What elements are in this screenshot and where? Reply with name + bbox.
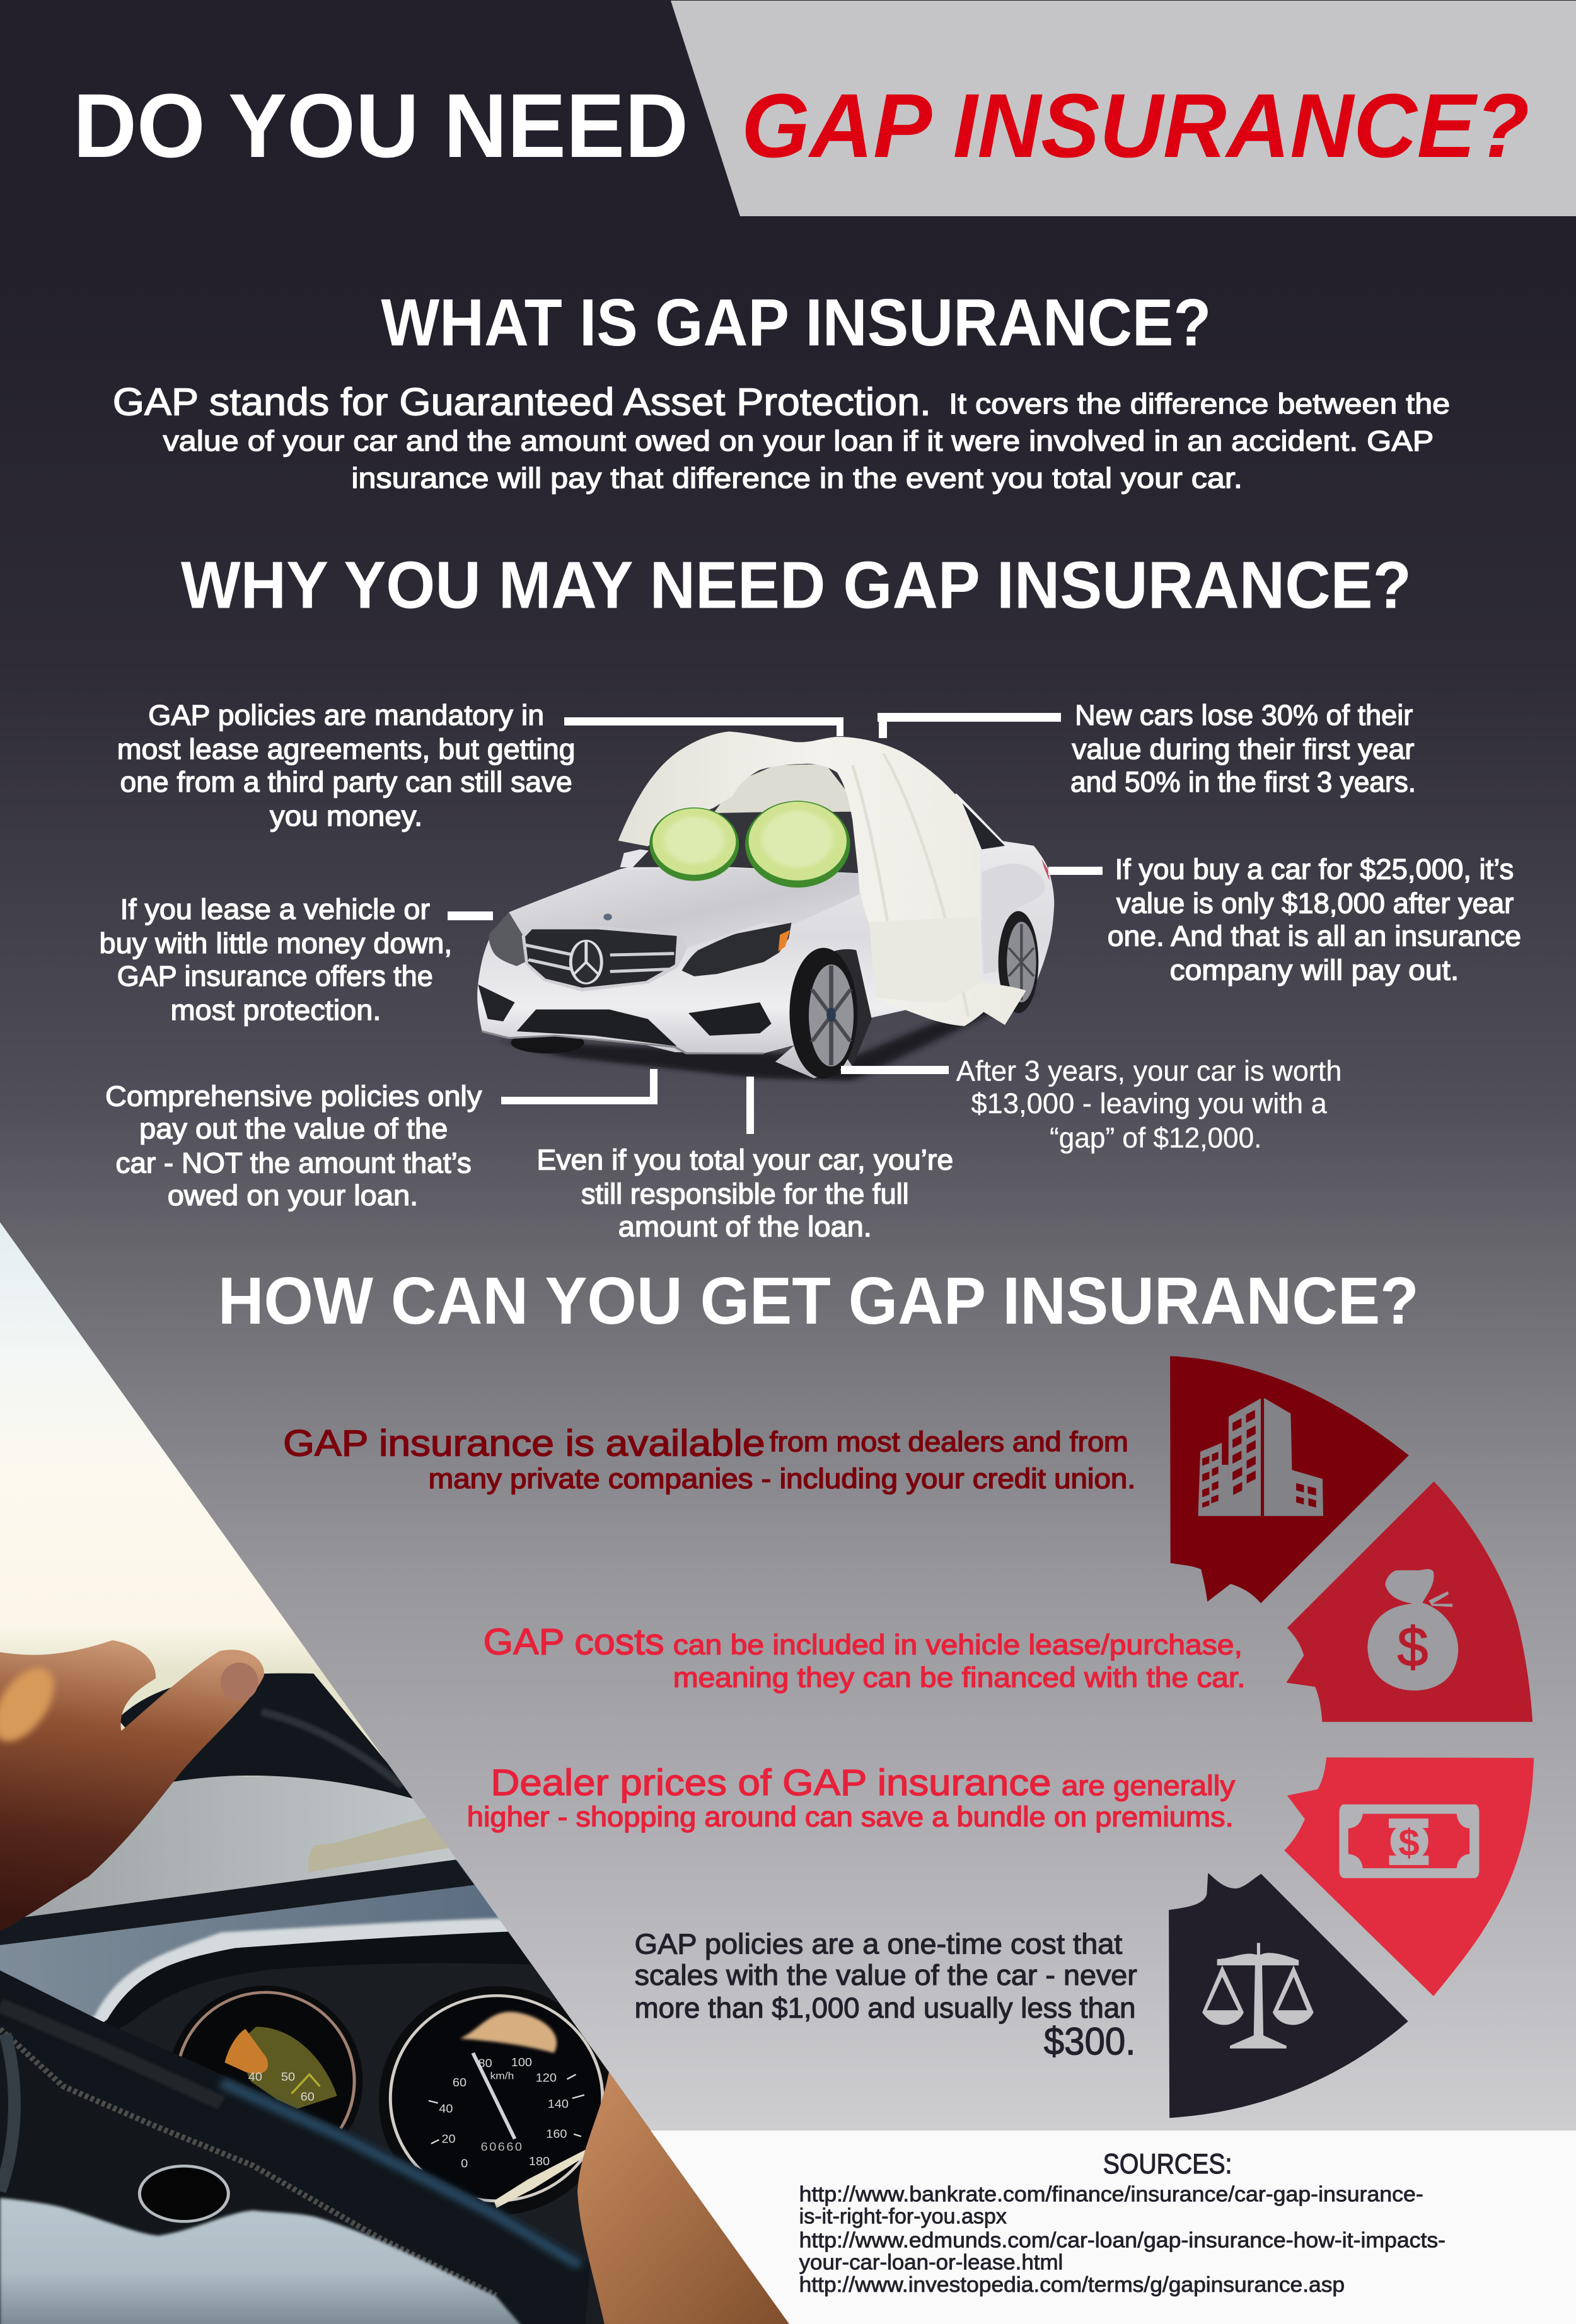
- section: what is gap insurance: [113, 286, 1450, 622]
- title: [73, 75, 1529, 176]
- callout: lease mandatory: most lease agreements, but getting: [117, 732, 576, 765]
- knuckle highlight: [0, 1666, 57, 1745]
- text: one-time cost: $300.: [1044, 2020, 1136, 2063]
- sector: bright red cash: [1284, 1757, 1534, 1996]
- left gauge: 40: [248, 2071, 262, 2084]
- sources list: is-it-right-for-you.aspx: [799, 2205, 1007, 2229]
- dash dark strip: [0, 1859, 475, 1945]
- headlight amber: [779, 930, 790, 951]
- grille frame: [522, 927, 687, 991]
- callout: depreciation: New cars lose 30% of their: [1075, 698, 1413, 731]
- text: costs: can be included in vehicle lease/purchase,: [673, 1630, 1243, 1661]
- horn button: [139, 2166, 228, 2221]
- text: costs: [484, 1622, 1246, 1693]
- callout: lease mandatory: GAP policies are mandatory in: [148, 698, 544, 731]
- right headlight: [682, 923, 791, 976]
- rear wheel: [999, 911, 1038, 1013]
- callout: total your car: still responsible for the full: [581, 1177, 909, 1210]
- wiper: [308, 1817, 449, 1873]
- sources list: [799, 2149, 1446, 2297]
- callout: lease vehicle: buy with little money down,: [100, 927, 452, 959]
- side panel shading: [982, 864, 1045, 974]
- front wheel: [789, 948, 857, 1078]
- section: how can you get: [283, 1423, 1446, 2297]
- speedometer: 60: [453, 2077, 466, 2090]
- thumbnail: [221, 1663, 258, 1701]
- rear tyre under left: [511, 1032, 584, 1053]
- side window: [963, 803, 1005, 850]
- speedometer: 0: [461, 2158, 468, 2170]
- hood emblem: [603, 914, 612, 920]
- callout: 25000 example: company will pay out.: [1170, 954, 1459, 986]
- speedometer: 120: [536, 2072, 557, 2084]
- photo dash cowl: [39, 1916, 560, 2069]
- callout: lease mandatory: [117, 698, 576, 832]
- connector lines: [448, 713, 1103, 1134]
- callout: 25000 example: If you buy a car for $25,000, it’s: [1115, 853, 1514, 886]
- callout: comprehensive policies: pay out the value of the: [139, 1112, 448, 1145]
- icon: money bag: [1367, 1569, 1458, 1691]
- text block: definition: It covers the difference between the: [949, 387, 1450, 420]
- callout: lease mandatory: one from a third party can still save: [120, 765, 572, 798]
- windshield: [627, 811, 858, 873]
- towel backing panel: [714, 764, 852, 813]
- left headlight: [489, 912, 525, 966]
- car shadow: [501, 993, 1034, 1080]
- text block: definition: insurance will pay that difference in the event you total your car.: [351, 461, 1243, 494]
- speedometer: 60660: [481, 2141, 523, 2154]
- title: gap insurance: GAP INSURANCE?: [741, 75, 1529, 176]
- text: one-time cost: [635, 1928, 1137, 2063]
- callout: after 3 years: [956, 1054, 1341, 1153]
- steering wheel rim: [0, 1970, 591, 2324]
- text: available: many private companies - including your credit union.: [429, 1464, 1136, 1494]
- left gauge: 60: [301, 2091, 315, 2103]
- callouts: [100, 698, 1521, 1338]
- right arm: [577, 2072, 836, 2324]
- callout: comprehensive policies: owed on your loan.: [168, 1179, 418, 1211]
- speedometer: [379, 1986, 614, 2215]
- sector: dark red building: [1170, 1356, 1409, 1604]
- mercedes logo: [571, 940, 601, 983]
- speedometer: 20: [442, 2133, 456, 2146]
- speedometer: 40: [439, 2103, 453, 2115]
- title: do you need: DO YOU NEED: [73, 75, 688, 176]
- grille: [525, 929, 677, 988]
- sources list: http://www.investopedia.com/terms/g/gapinsurance.asp: [799, 2273, 1345, 2297]
- callout: comprehensive policies: Comprehensive policies only: [105, 1079, 482, 1112]
- text: available: from most dealers and from: [770, 1426, 1128, 1457]
- callout: total your car: Even if you total your car, you’re: [536, 1143, 953, 1176]
- callout: 25000 example: [1108, 853, 1521, 986]
- heading: why you may need: WHY YOU MAY NEED GAP INSURANCE?: [181, 548, 1411, 622]
- icon: buildings: [1198, 1398, 1323, 1516]
- callout: depreciation: [1070, 698, 1416, 798]
- rim texture: [0, 2029, 496, 2296]
- instrument panel: [120, 1963, 651, 2324]
- sources list: http://www.bankrate.com/finance/insurance/car-gap-insurance-: [799, 2182, 1423, 2206]
- sources list: your-car-loan-or-lease.html: [799, 2251, 1063, 2275]
- left gauge: [168, 1986, 362, 2177]
- speedometer: 140: [548, 2098, 569, 2111]
- callout: after 3 years: “gap” of $12,000.: [1050, 1121, 1261, 1153]
- callout: comprehensive policies: [105, 1079, 482, 1211]
- photo dashboard: [0, 1860, 680, 2171]
- sources list: SOURCES:: [1103, 2149, 1232, 2180]
- speedometer: 180: [529, 2156, 550, 2168]
- wheel arch: [798, 949, 872, 1067]
- car body: [477, 794, 1054, 1078]
- text block: definition: [113, 381, 1450, 494]
- callout: after 3 years: $13,000 - leaving you with a: [971, 1087, 1327, 1119]
- speedometer: 100: [511, 2057, 532, 2069]
- sources panel: [651, 2130, 1576, 2324]
- callout: lease vehicle: GAP insurance offers the: [117, 959, 433, 992]
- icon: scales of justice: [1202, 1943, 1314, 2049]
- towel drape: [618, 732, 1026, 1026]
- dollar sign on bag: $: [1398, 1616, 1428, 1678]
- callout: depreciation: and 50% in the first 3 years.: [1070, 765, 1416, 798]
- lower intake and vents: [517, 1010, 677, 1046]
- spoke texture: [0, 2034, 14, 2192]
- sources list: http://www.edmunds.com/car-loan/gap-insurance-how-it-impacts-: [799, 2228, 1446, 2252]
- text: available: [283, 1423, 1136, 1494]
- cucumber slices: [649, 801, 850, 887]
- callout: after 3 years: After 3 years, your car is worth: [956, 1054, 1341, 1087]
- text: one-time cost: GAP policies are a one-time cost that: [635, 1928, 1123, 1960]
- text: dealer prices: [467, 1762, 1236, 1832]
- towel waffle band: [870, 917, 982, 1002]
- callout: total your car: [536, 1143, 953, 1242]
- text: costs: meaning they can be financed with the car.: [673, 1662, 1246, 1693]
- speedometer: km/h: [490, 2070, 514, 2081]
- photo windshield: [25, 1776, 456, 1917]
- callout: depreciation: value during their first year: [1072, 732, 1415, 765]
- hood: [509, 868, 859, 948]
- text block: definition: GAP stands for Guaranteed Asset Protection.: [113, 381, 931, 424]
- hand on wheel: [0, 1640, 264, 1931]
- text: available: GAP insurance is available: [283, 1423, 765, 1464]
- text: dealer prices: higher - shopping around can save a bundle on premiums.: [467, 1801, 1234, 1832]
- heading: how can you get: HOW CAN YOU GET GAP INSURANCE?: [218, 1264, 1419, 1338]
- photo: driver at steering wheel: [0, 1194, 836, 2324]
- car illustration with towel and cucumbers: [477, 732, 1054, 1080]
- heading: what is gap insurance: WHAT IS GAP INSURANCE?: [381, 286, 1211, 360]
- side mirror: [620, 850, 649, 868]
- text block: definition: value of your car and the amount owed on your loan if it were involved in an accident. GAP: [163, 424, 1434, 457]
- text: costs: GAP costs: [484, 1622, 664, 1663]
- sleeve: [0, 2198, 533, 2324]
- callout: lease vehicle: [100, 893, 452, 1026]
- steering wheel hub: [0, 2030, 523, 2324]
- front splitter: [482, 1031, 763, 1053]
- text: dealer prices: Dealer prices of GAP insurance: [490, 1762, 1051, 1803]
- callout: lease mandatory: you money.: [270, 799, 422, 832]
- icon: banknote: [1339, 1805, 1479, 1878]
- callout: lease vehicle: If you lease a vehicle or: [120, 893, 430, 925]
- title banner panel: [671, 1, 1576, 216]
- towel folds: [852, 753, 968, 1017]
- photo sky: [0, 1222, 397, 1776]
- dollar sign on bill: $: [1398, 1822, 1420, 1864]
- sector: red money bag: [1286, 1481, 1533, 1722]
- text: one-time cost: more than $1,000 and usually less than: [635, 1991, 1136, 2024]
- text: one-time cost: scales with the value of the car - never: [635, 1958, 1137, 1991]
- pointer stalk: [494, 2148, 591, 2208]
- sector: dark scales: [1169, 1873, 1408, 2118]
- callout: lease vehicle: most protection.: [170, 993, 381, 1026]
- taillight: [1041, 859, 1049, 880]
- callout: comprehensive policies: car - NOT the amount that’s: [115, 1146, 472, 1179]
- speedometer: 80: [478, 2057, 492, 2070]
- callout: 25000 example: one. And that is all an insurance: [1108, 919, 1521, 952]
- callout: total your car: amount of the loan.: [618, 1210, 872, 1242]
- top of steering wheel: [118, 1674, 418, 1800]
- rim highlight: [221, 2083, 580, 2265]
- callout: 25000 example: value is only $18,000 after year: [1116, 887, 1514, 920]
- text: dealer prices: are generally: [1062, 1771, 1236, 1801]
- left gauge: 50: [281, 2071, 295, 2084]
- speedometer: 160: [546, 2128, 567, 2141]
